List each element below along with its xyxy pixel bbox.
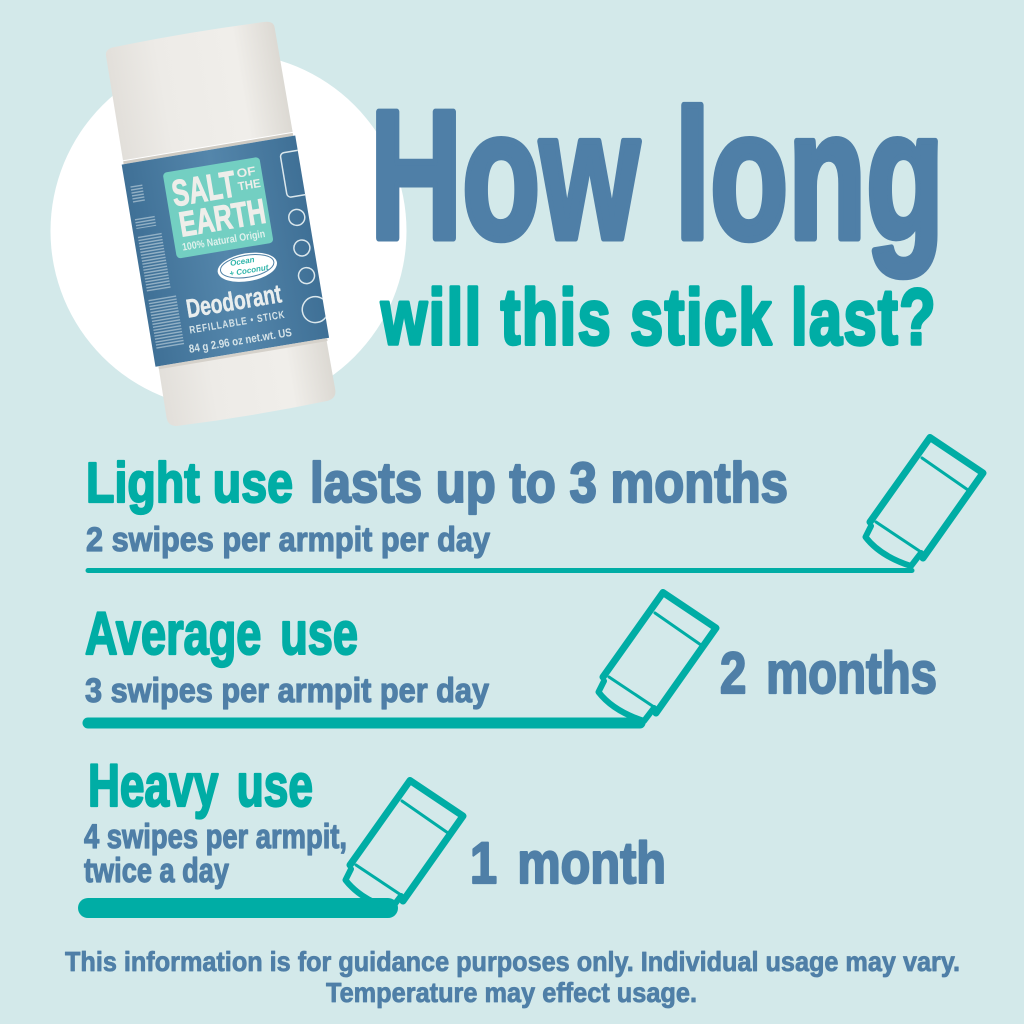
detail: 2 swipes: 2 swipes per armpit per day <box>86 521 490 559</box>
baseline bar <box>88 718 640 728</box>
product: deodorant stick: 100% Natural Origin <box>181 228 266 254</box>
detail: twice a day: twice a day <box>84 852 229 890</box>
product: deodorant stick <box>102 17 351 429</box>
side ingredient text <box>136 184 170 348</box>
product label <box>122 136 329 367</box>
disclaimer <box>65 946 960 1008</box>
heading: heavy use: Heavy use <box>88 752 313 819</box>
flavour oval <box>215 248 279 286</box>
icon: stick outline <box>346 780 463 909</box>
duration: up to 3 months: lasts up to 3 months <box>310 451 788 515</box>
product: deodorant stick: Deodorant <box>184 278 284 324</box>
icon: stick outline <box>598 592 716 721</box>
product: deodorant stick: OF <box>236 164 257 181</box>
duration: 1 month: 1 month <box>470 831 666 896</box>
product: deodorant stick: THE <box>237 176 262 194</box>
side certification icons <box>280 150 326 324</box>
detail: 4 swipes: 4 swipes per armpit, <box>84 818 347 856</box>
product: deodorant stick: REFILLABLE • STICK <box>189 309 286 337</box>
baseline bar <box>88 568 912 573</box>
flavour oval: + Coconut <box>229 263 269 278</box>
heading: light use: Light use <box>86 451 293 515</box>
logo panel <box>163 157 274 259</box>
product: deodorant stick: EARTH <box>176 192 269 245</box>
icon: stick outline <box>866 438 983 566</box>
product: deodorant stick: 84 g 2.96 oz net.wt. US <box>188 327 293 356</box>
heading: average use: Average use <box>85 600 358 667</box>
flavour oval: Ocean <box>230 255 255 268</box>
product: deodorant stick: SALT <box>169 163 239 214</box>
detail: 3 swipes: 3 swipes per armpit per day <box>85 672 489 710</box>
row: average use <box>85 592 937 723</box>
baseline bar <box>88 898 388 918</box>
white circle behind product <box>50 53 406 409</box>
duration: 2 months: 2 months <box>720 641 937 706</box>
row: heavy use <box>84 752 666 909</box>
disclaimer: Temperature may effect usage. <box>326 977 697 1008</box>
row: light use <box>86 438 983 570</box>
